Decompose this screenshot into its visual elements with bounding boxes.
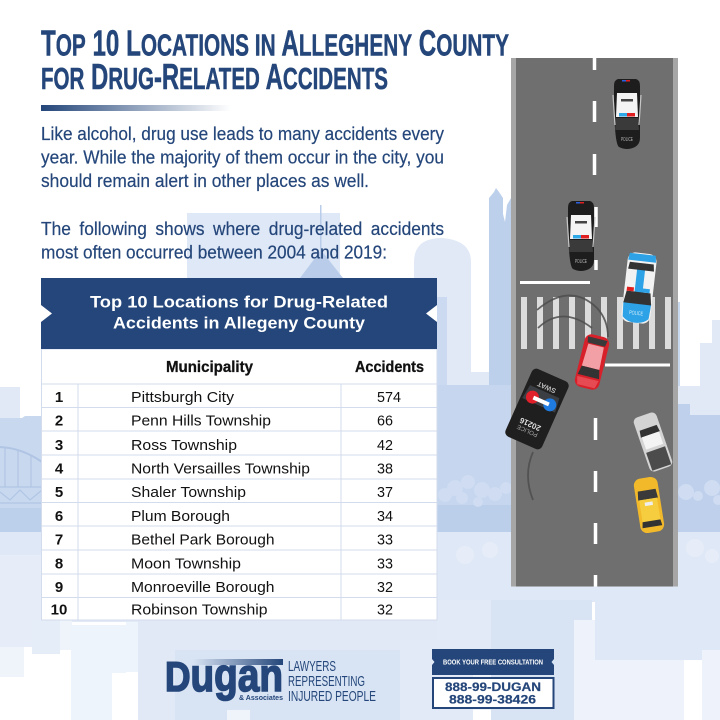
background: water reflection bbox=[0, 532, 45, 555]
table ranks: 5 bbox=[55, 484, 63, 501]
table accident counts bbox=[377, 390, 401, 618]
background: city skyline bbox=[0, 188, 720, 720]
table accident counts: 33 bbox=[377, 556, 393, 572]
title underline gradient bbox=[41, 105, 231, 111]
background: tree line bbox=[438, 475, 720, 507]
road illustration bbox=[504, 58, 678, 586]
title: FOR DRUG-RELATED ACCIDENTS bbox=[41, 56, 388, 97]
phone numbers box: 888-99-DUGAN bbox=[445, 682, 541, 694]
table municipalities: Moon Township bbox=[131, 556, 241, 572]
SWAT police van bbox=[504, 367, 570, 451]
table accident counts: 38 bbox=[377, 462, 393, 478]
table ranks: 4 bbox=[55, 460, 64, 478]
police car 1 bbox=[613, 79, 641, 149]
intro text bbox=[41, 123, 445, 262]
table municipalities: Bethel Park Borough bbox=[131, 532, 274, 548]
phone numbers box bbox=[433, 678, 554, 708]
table municipalities bbox=[131, 390, 310, 618]
table column headings: Municipality bbox=[166, 359, 253, 376]
table accident counts: 33 bbox=[377, 532, 393, 548]
logo tagline: LAWYERS bbox=[288, 659, 336, 675]
silver pickup bbox=[632, 411, 674, 473]
logo tagline: REPRESENTING bbox=[288, 674, 365, 690]
table accident counts: 42 bbox=[377, 438, 393, 454]
police car 2: POLICE bbox=[575, 259, 587, 265]
SWAT police van: SWAT bbox=[536, 379, 557, 394]
blue police car: POLICE bbox=[629, 310, 644, 318]
logo: Dugan & Associates bbox=[165, 649, 376, 705]
table ranks: 6 bbox=[55, 508, 63, 525]
table ranks: 3 bbox=[55, 437, 63, 454]
intro text: should remain alert in other places as well. bbox=[41, 170, 369, 191]
table banner: Accidents in Allegeny County bbox=[113, 314, 366, 332]
table ranks: 1 bbox=[55, 389, 63, 406]
table municipalities: Shaler Township bbox=[131, 485, 246, 501]
yellow taxi bbox=[633, 476, 665, 534]
logo tagline: INJURED PEOPLE bbox=[288, 689, 376, 705]
table bbox=[41, 278, 437, 620]
table ranks: 9 bbox=[55, 579, 63, 596]
police car 1: POLICE bbox=[621, 137, 633, 143]
police car 2 bbox=[567, 201, 595, 271]
SWAT police van: POLICE bbox=[516, 423, 539, 437]
table municipalities: North Versailles Township bbox=[131, 462, 310, 478]
table ranks: 10 bbox=[51, 602, 67, 618]
table municipalities: Monroeville Borough bbox=[131, 580, 274, 596]
stop lines bbox=[520, 282, 670, 365]
call to action banner bbox=[432, 649, 554, 675]
table ranks bbox=[51, 389, 67, 618]
table accident counts: 574 bbox=[377, 390, 401, 406]
skid marks bbox=[528, 295, 608, 500]
table accident counts: 37 bbox=[377, 485, 393, 501]
table body bbox=[42, 349, 437, 620]
intro text: year. While the majority of them occur in the city, you bbox=[41, 146, 444, 168]
table municipalities: Plum Borough bbox=[131, 509, 230, 525]
lane dashes bbox=[594, 58, 596, 586]
phone numbers box: 888-99-38426 bbox=[449, 694, 536, 706]
intro text: The following shows where drug-related accidents bbox=[41, 218, 444, 239]
table accident counts: 32 bbox=[377, 580, 393, 596]
intro text: Like alcohol, drug use leads to many accidents every bbox=[41, 123, 445, 144]
table accident counts: 32 bbox=[377, 602, 393, 618]
title: TOP 10 LOCATIONS IN ALLEGHENY COUNTY bbox=[41, 22, 509, 64]
table accident counts: 34 bbox=[377, 509, 393, 525]
table municipalities: Ross Township bbox=[131, 438, 237, 454]
call to action banner: BOOK YOUR FREE CONSULTATION bbox=[443, 660, 543, 666]
crosswalk bbox=[521, 297, 671, 349]
background: bridge bbox=[0, 447, 42, 503]
table ranks: 7 bbox=[55, 532, 63, 548]
title bbox=[41, 22, 509, 97]
table municipalities: Pittsburgh City bbox=[131, 390, 235, 406]
red car bbox=[573, 333, 611, 391]
table accident counts: 66 bbox=[377, 414, 393, 430]
logo: Dugan & Associates: Dugan bbox=[165, 649, 283, 701]
table column headings: Accidents bbox=[355, 359, 424, 376]
logo tagline bbox=[288, 659, 376, 705]
table ranks: 8 bbox=[55, 556, 63, 572]
intro text: most often occurred between 2004 and 2019: bbox=[41, 242, 387, 262]
blue police car bbox=[621, 252, 657, 324]
logo: Dugan & Associates: & Associates bbox=[239, 693, 283, 702]
table column headings bbox=[166, 359, 424, 376]
table banner: Top 10 Locations for Drug-Related bbox=[90, 294, 388, 312]
table banner bbox=[41, 278, 437, 349]
table ranks: 2 bbox=[55, 412, 63, 430]
table municipalities: Robinson Township bbox=[131, 602, 268, 618]
table municipalities: Penn Hills Township bbox=[131, 414, 271, 430]
SWAT police van: 20216 bbox=[518, 415, 542, 433]
